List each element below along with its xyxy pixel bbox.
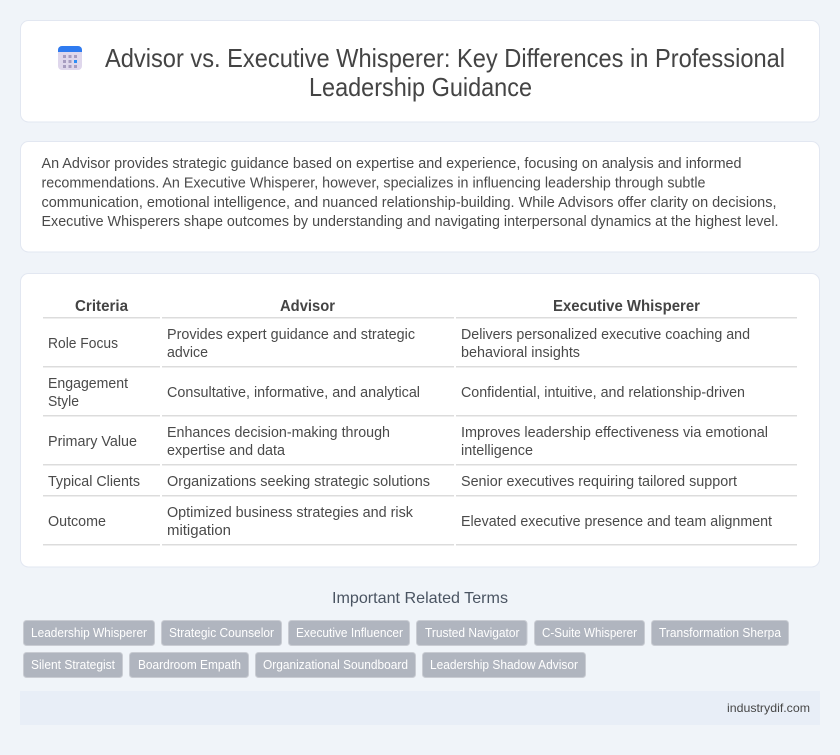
row: role focus: Provides expert guidance and strategic — [167, 327, 415, 343]
panel: comparison table — [20, 274, 820, 567]
tag: Transformation Sherpa — [652, 620, 788, 646]
tag: Strategic Counselor: Strategic Counselor — [169, 626, 274, 640]
tag: Trusted Navigator — [416, 620, 527, 646]
row: role focus: Role Focus — [48, 336, 118, 352]
tag: C-Suite Whisperer — [534, 620, 644, 646]
description text: recommendations. An Executive Whisperer, however, specializes in influencing leadership through subtle — [42, 176, 706, 192]
row: outcome: mitigation — [167, 523, 231, 539]
row: primary value: expertise and data — [167, 443, 286, 459]
tag: Executive Influencer: Executive Influencer — [296, 626, 403, 640]
footer source text: industrydif.com — [727, 701, 810, 715]
row: primary value: intelligence — [461, 443, 533, 459]
icon: calendar — [58, 46, 82, 70]
tag: Leadership Shadow Advisor — [422, 652, 586, 678]
row: outcome: Optimized business strategies and risk — [167, 505, 414, 521]
row: engagement style: Confidential, intuitive, and relationship-driven — [461, 385, 745, 401]
table header row — [75, 298, 700, 315]
row: outcome: Outcome — [48, 514, 106, 530]
tag: Strategic Counselor — [162, 620, 282, 646]
row: primary value — [48, 425, 768, 459]
row: role focus: behavioral insights — [461, 345, 580, 361]
row: role focus: advice — [167, 345, 208, 361]
row: engagement style: Engagement — [48, 376, 128, 392]
tag: Transformation Sherpa: Transformation Sherpa — [659, 626, 781, 640]
tag: Boardroom Empath: Boardroom Empath — [138, 658, 241, 672]
row: typical clients — [48, 474, 737, 490]
row: engagement style — [48, 376, 745, 410]
table header row: Executive Whisperer — [553, 298, 700, 315]
title: Advisor vs. Executive Whisperer: Key Differences in Professional — [105, 43, 785, 73]
heading: important related terms: Important Related Terms — [332, 590, 508, 607]
row: engagement style: Consultative, informative, and analytical — [167, 385, 420, 401]
tag: Leadership Shadow Advisor: Leadership Shadow Advisor — [430, 658, 578, 672]
related term tags — [24, 620, 788, 678]
description text: An Advisor provides strategic guidance based on expertise and experience, focusing on analysis and informed — [42, 156, 742, 172]
panel: description — [20, 142, 820, 252]
tag: Trusted Navigator: Trusted Navigator — [425, 626, 520, 640]
tag: Leadership Whisperer — [24, 620, 154, 646]
row: outcome — [48, 505, 772, 539]
table header row: Advisor — [280, 298, 335, 315]
row: primary value: Improves leadership effectiveness via emotional — [461, 425, 768, 441]
row: primary value: Enhances decision-making through — [167, 425, 390, 441]
description text: communication, emotional intelligence, and nuanced relationship-building. While Advisors offer clarity on decisions, — [42, 195, 776, 211]
title: Leadership Guidance — [309, 72, 532, 102]
tag: Organizational Soundboard: Organizational Soundboard — [263, 658, 408, 672]
row: typical clients: Typical Clients — [48, 474, 140, 490]
title — [105, 43, 785, 102]
description text — [42, 156, 778, 230]
tag: Silent Strategist — [24, 652, 122, 678]
row: outcome: Elevated executive presence and team alignment — [461, 514, 772, 530]
tag: Organizational Soundboard — [256, 652, 416, 678]
row: typical clients: Senior executives requiring tailored support — [461, 474, 737, 490]
description text: Executive Whisperers shape outcomes by understanding and navigating interpersonal dynamics at the highest level. — [42, 214, 778, 230]
tag: C-Suite Whisperer: C-Suite Whisperer — [542, 626, 637, 640]
tag: Silent Strategist: Silent Strategist — [31, 658, 116, 672]
tag: Leadership Whisperer: Leadership Whisperer — [31, 626, 147, 640]
row: primary value: Primary Value — [48, 434, 137, 450]
row: engagement style: Style — [48, 394, 79, 410]
tag: Boardroom Empath — [130, 652, 248, 678]
row: role focus: Delivers personalized executive coaching and — [461, 327, 750, 343]
row: role focus — [48, 327, 750, 361]
footer bar — [20, 691, 820, 725]
tag: Executive Influencer — [288, 620, 410, 646]
row: typical clients: Organizations seeking strategic solutions — [167, 474, 430, 490]
table header row: Criteria — [75, 298, 128, 315]
header panel — [20, 20, 820, 122]
